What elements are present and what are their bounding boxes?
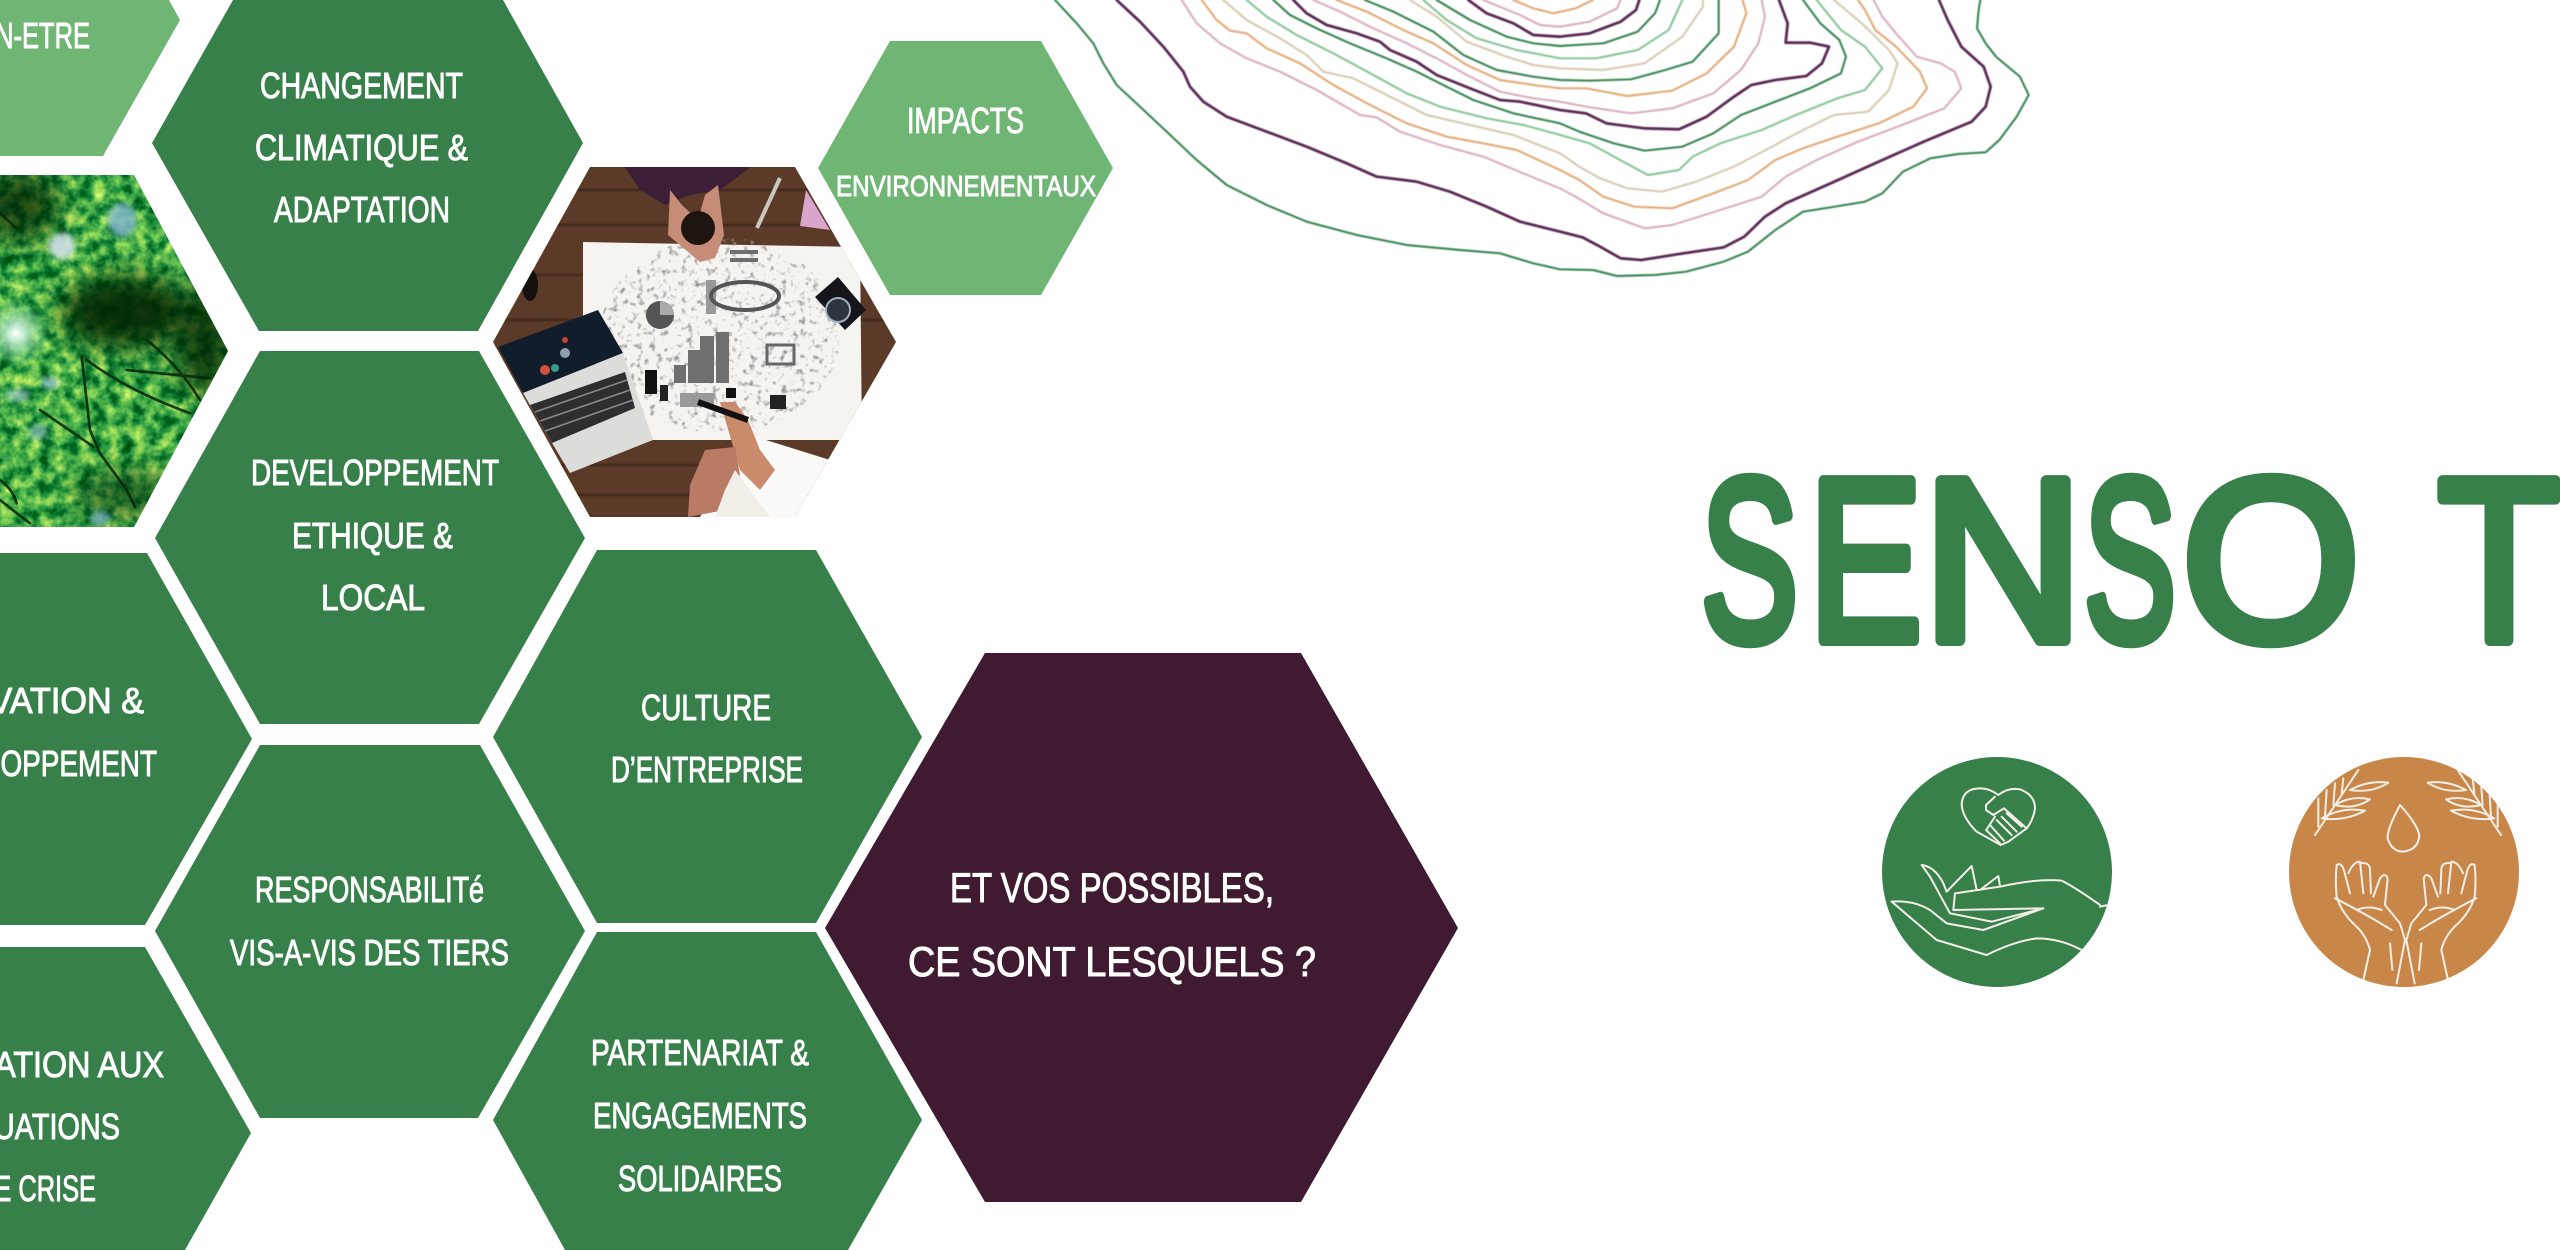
contour lines illustration: [1055, 0, 2029, 276]
hexagon: adaptation aux situations de crise: [0, 947, 251, 1250]
title: Senso T: S: [2084, 431, 2176, 689]
label: changement climatique et adaptation: CLIMATIQUE &: [255, 127, 468, 168]
label: culture d'entreprise: D’ENTREPRISE: [611, 749, 803, 790]
label: et vos possibles, ce sont lesquels ?: ET VOS POSSIBLES,: [950, 864, 1274, 911]
hexagon: changement climatique et adaptation: [152, 0, 583, 331]
label: responsabilité vis-à-vis des tiers: RESPONSABILITé: [255, 869, 484, 910]
label: changement climatique et adaptation: ADAPTATION: [274, 189, 450, 230]
label: culture d'entreprise: [611, 687, 803, 790]
label: partenariat et engagements solidaires: PARTENARIAT &: [591, 1032, 809, 1073]
title: Senso T: O: [2182, 431, 2360, 689]
title: Senso T: [1701, 431, 2560, 689]
label: impacts environnementaux: IMPACTS: [907, 100, 1024, 141]
label: impacts environnementaux: ENVIRONNEMENTAUX: [836, 171, 1096, 203]
icon: green circle, hands and heart handshake: [1882, 757, 2112, 987]
title: Senso T: N: [1923, 431, 2083, 689]
label: développement éthique et local: DEVELOPPEMENT: [251, 452, 499, 493]
hexagon: et vos possibles: [825, 653, 1458, 1202]
label: adaptation aux situations de crise: [0, 1044, 164, 1209]
label: changement climatique et adaptation: CHANGEMENT: [260, 65, 463, 106]
label: et vos possibles, ce sont lesquels ?: [908, 864, 1316, 985]
hexagon: culture d'entreprise: [493, 550, 922, 923]
label: et vos possibles, ce sont lesquels ?: CE SONT LESQUELS ?: [908, 938, 1316, 985]
label: innovation et développement: [0, 680, 157, 784]
hexagon: responsabilité vis-à-vis des tiers: [155, 745, 585, 1118]
title: Senso T: E: [1809, 431, 1922, 689]
title: Senso T: S: [1701, 431, 1798, 689]
label: développement éthique et local: LOCAL: [321, 577, 425, 618]
photo hexagon: forest canopy: [0, 169, 240, 530]
hexagon: impacts environnementaux: [818, 41, 1113, 295]
label: partenariat et engagements solidaires: [591, 1032, 809, 1199]
label: responsabilité vis-à-vis des tiers: VIS-A-VIS DES TIERS: [230, 932, 509, 973]
hexagon: développement éthique et local: [155, 351, 585, 724]
photo hexagon: desk with brainstorming sheet: [493, 167, 896, 517]
hexagon: bien-être: [0, 0, 180, 156]
icon: orange circle, hands, droplet and wheat: [2289, 757, 2519, 987]
label: culture d'entreprise: CULTURE: [641, 687, 771, 728]
hexagon: innovation et développement: [0, 553, 252, 925]
label: changement climatique et adaptation: [255, 65, 468, 230]
label: responsabilité vis-à-vis des tiers: [230, 869, 509, 973]
label: développement éthique et local: ETHIQUE &: [292, 515, 453, 556]
hexagon: partenariat et engagements solidaires: [493, 932, 922, 1250]
label: développement éthique et local: [251, 452, 499, 618]
label: partenariat et engagements solidaires: SOLIDAIRES: [618, 1158, 782, 1199]
label: impacts environnementaux: [836, 100, 1096, 203]
label: partenariat et engagements solidaires: ENGAGEMENTS: [593, 1095, 807, 1136]
